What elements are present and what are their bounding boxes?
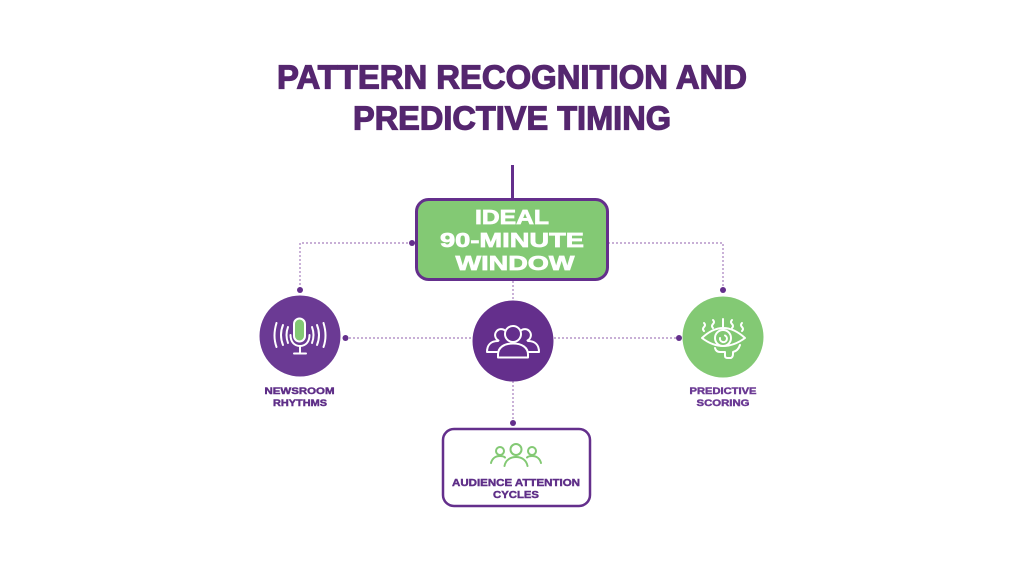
central box: ideal 90-minute window: WINDOW <box>456 253 575 275</box>
box label: CYCLES <box>493 489 539 501</box>
node: predictive scoring <box>682 296 764 378</box>
label: predictive scoring <box>690 386 756 409</box>
node: audience <box>472 300 554 382</box>
node: newsroom rhythms <box>260 296 340 376</box>
dotted connectors <box>300 243 723 423</box>
central box: ideal 90-minute window: IDEAL <box>475 207 549 229</box>
label: newsroom rhythms: RHYTHMS <box>273 398 327 409</box>
icon: people outline <box>487 326 539 358</box>
title: PREDICTIVE TIMING <box>353 100 671 136</box>
box label <box>452 477 580 501</box>
label: predictive scoring: SCORING <box>696 398 750 409</box>
box label: AUDIENCE ATTENTION <box>452 477 580 489</box>
title <box>277 58 747 136</box>
icon: microphone <box>274 318 326 354</box>
central box: ideal 90-minute window: 90-MINUTE <box>440 230 584 252</box>
label: newsroom rhythms <box>264 386 335 409</box>
icon: eye with brain <box>702 319 745 358</box>
top stem line <box>511 165 514 200</box>
connector end dots <box>297 240 726 426</box>
label: predictive scoring: PREDICTIVE <box>690 386 756 397</box>
title: PATTERN RECOGNITION AND <box>277 58 747 96</box>
box: audience attention cycles <box>443 429 590 506</box>
icon: green people <box>491 444 541 466</box>
central box: ideal 90-minute window <box>416 200 608 280</box>
label: newsroom rhythms: NEWSROOM <box>264 386 335 397</box>
